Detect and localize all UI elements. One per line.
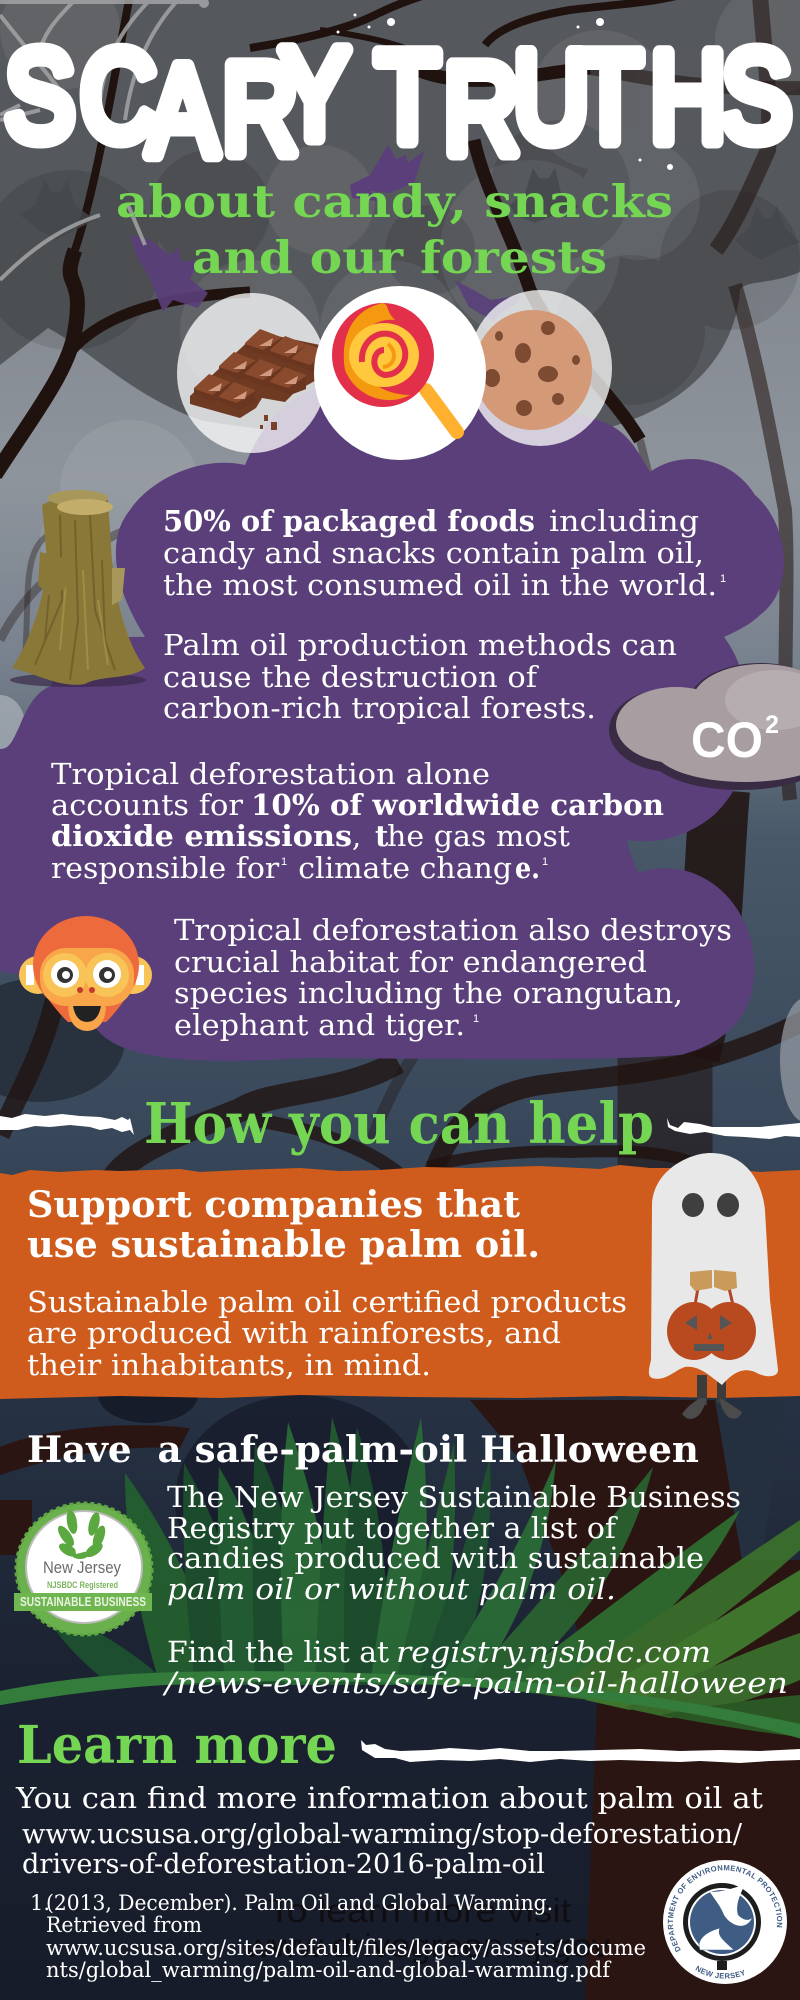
- faint hidden text: To learn more visit: [268, 1892, 571, 1929]
- text block: palm oil share: [163, 504, 726, 602]
- text block: palm oil share: candy and snacks contain palm oil,: [163, 536, 704, 570]
- text block: sustainable palm oil: [27, 1285, 627, 1382]
- text block: carbon emissions: 1: [281, 856, 287, 868]
- icon: CO2 cloud: [609, 663, 800, 790]
- text block: carbon emissions: t: [375, 819, 389, 853]
- seal: NJ DEP: DEPARTMENT OF ENVIRONMENTAL PROTECTION: [668, 1865, 782, 1952]
- brown trunk: [470, 1400, 800, 2000]
- footnote: nts/global_warming/palm-oil-and-global-warming.pdf: [46, 1958, 612, 1982]
- title: TRUTHS: [376, 24, 792, 180]
- text block: carbon emissions: accounts for: [51, 788, 243, 822]
- text block: palm oil share: 50% of packaged foods: [163, 504, 535, 538]
- subtitle: and our forests: [192, 231, 607, 284]
- text block: carbon emissions: he gas most: [387, 819, 570, 853]
- panel: orange band: [0, 1165, 800, 1399]
- icon: CO2 cloud: CO: [691, 712, 763, 768]
- subtitle: [116, 175, 673, 284]
- text block: sustainable palm oil: Sustainable palm oil certified products: [27, 1285, 627, 1319]
- text block: registry: The New Jersey Sustainable Business: [167, 1480, 741, 1514]
- text block: sustainable palm oil: their inhabitants, in mind.: [27, 1348, 431, 1382]
- text block: habitat: 1: [473, 1013, 479, 1025]
- text block: habitat: [174, 913, 732, 1042]
- text block: registry: /news-events/safe-palm-oil-halloween: [162, 1666, 788, 1700]
- torn strip left: [0, 1114, 134, 1135]
- spider web: [0, 0, 207, 280]
- text block: sustainable palm oil: are produced with rainforests, and: [27, 1316, 561, 1350]
- icon: lollipop: [314, 286, 486, 460]
- badge: NJ sustainable business: [14, 1503, 152, 1635]
- title: [5, 22, 792, 182]
- footnote: 1.: [30, 1891, 50, 1915]
- icon: ghost: [649, 1153, 778, 1419]
- palm fronds: [45, 1417, 800, 1737]
- heading: how you can help: How you can help: [144, 1091, 654, 1157]
- badge: NJ sustainable business: NJSBDC Registered: [47, 1580, 118, 1590]
- subtitle: about candy, snacks: [116, 175, 673, 228]
- title: SCARY: [5, 22, 350, 182]
- text block: habitat: species including the orangutan,: [174, 976, 683, 1010]
- text block: habitat: crucial habitat for endangered: [174, 945, 647, 979]
- badge: NJ sustainable business: SUSTAINABLE BUSINESS: [20, 1594, 146, 1609]
- text block: carbon emissions: dioxide emissions: [51, 819, 352, 853]
- panel: purple cloud: [0, 385, 784, 1061]
- text block: carbon emissions: e.: [515, 851, 540, 885]
- heading: learn more: Learn more: [17, 1715, 337, 1776]
- icon: tree stump: [10, 490, 146, 687]
- text block: palm oil share: the most consumed oil in the world.: [163, 568, 717, 602]
- text block: production methods: [163, 628, 677, 725]
- text block: registry: Find the list at: [167, 1635, 389, 1669]
- icon: chocolate: [177, 293, 328, 453]
- text block: production methods: carbon-rich tropical forests.: [163, 691, 596, 725]
- text block: carbon emissions: 1: [542, 856, 548, 868]
- text block: registry: [162, 1480, 788, 1700]
- text block: more information: [15, 1781, 763, 1880]
- canopy: [0, 0, 800, 437]
- text block: more information: www.ucsusa.org/global-warming/stop-deforestation/: [22, 1819, 743, 1850]
- icon: orangutan: [19, 916, 152, 1031]
- text block: registry: registry.njsbdc.com: [396, 1635, 711, 1669]
- seal: NJ DEP: NEW JERSEY: [695, 1966, 744, 1979]
- badge: NJ sustainable business: New Jersey: [43, 1558, 121, 1577]
- icon: CO2 cloud: 2: [765, 711, 779, 739]
- trees: [0, 0, 800, 1180]
- torn strip right: [667, 1118, 800, 1139]
- faint hidden text: [244, 1892, 611, 1964]
- footnote: [30, 1891, 646, 1982]
- text block: support companies: use sustainable palm oil.: [27, 1224, 540, 1266]
- text block: carbon emissions: Tropical deforestation alone: [51, 757, 490, 791]
- heading: safe palm oil halloween: Have a safe-palm-oil Halloween: [27, 1429, 699, 1471]
- seal: NJ DEP: [663, 1860, 787, 1984]
- footnote: (2013, December). Palm Oil and Global Warming.: [46, 1891, 553, 1915]
- text block: carbon emissions: [51, 757, 664, 885]
- text block: more information: You can find more information about palm oil at: [15, 1781, 763, 1815]
- text block: carbon emissions: 10% of worldwide carbon: [251, 788, 664, 822]
- text block: carbon emissions: responsible for climate chang: [51, 851, 512, 885]
- faint hidden text: www.drivegreen.nj.gov: [244, 1927, 611, 1964]
- footnote: www.ucsusa.org/sites/default/files/legacy/assets/docume: [46, 1936, 646, 1960]
- text block: palm oil share: including: [549, 504, 699, 538]
- text block: production methods: Palm oil production methods can: [163, 628, 677, 662]
- torn strip learn more: [361, 1740, 800, 1763]
- text block: support companies: Support companies that: [27, 1184, 520, 1226]
- text block: registry: candies produced with sustainable: [167, 1541, 704, 1575]
- text block: registry: palm oil or without palm oil.: [167, 1572, 616, 1606]
- snow dots: [336, 14, 673, 170]
- text block: habitat: Tropical deforestation also destroys: [174, 913, 732, 947]
- footnote: Retrieved from: [46, 1913, 202, 1937]
- palm stem: [0, 1671, 800, 1740]
- text block: palm oil share: 1: [720, 573, 726, 585]
- text block: more information: drivers-of-deforestation-2016-palm-oil: [22, 1849, 545, 1880]
- text block: carbon emissions: ,: [352, 819, 361, 853]
- text block: registry: Registry put together a list of: [167, 1511, 618, 1545]
- text block: habitat: elephant and tiger.: [174, 1008, 465, 1042]
- icon: cookie: [468, 290, 612, 446]
- bats: [130, 145, 521, 321]
- text block: production methods: cause the destruction of: [163, 660, 539, 694]
- text block: support companies: [27, 1184, 540, 1266]
